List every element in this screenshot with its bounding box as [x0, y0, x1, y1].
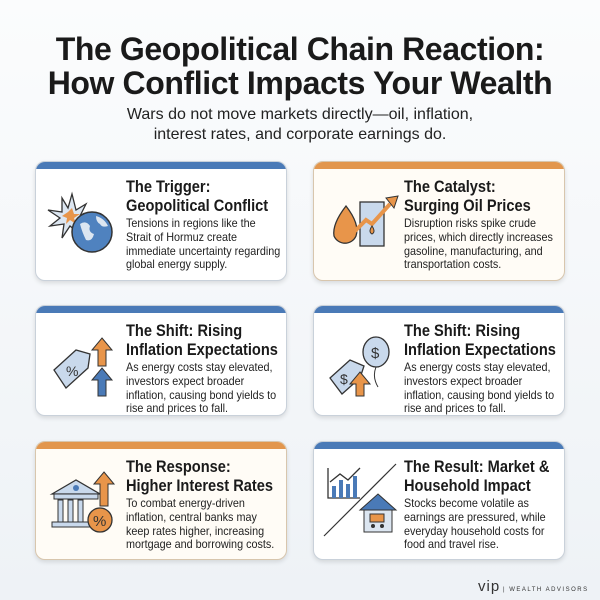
icon: bank with percent — [50, 471, 115, 533]
heading: Inflation Expectations — [126, 340, 278, 359]
title — [48, 31, 552, 101]
text — [404, 216, 553, 271]
panel: shift left — [35, 305, 287, 416]
heading: Surging Oil Prices — [404, 196, 531, 215]
text: keep rates higher, increasing — [126, 524, 264, 538]
text: inflation, central banks may — [126, 510, 257, 524]
text: global energy supply. — [126, 257, 227, 271]
heading — [404, 457, 549, 495]
icon: bank with percent: % — [93, 513, 106, 530]
heading — [404, 177, 531, 215]
text: As energy costs stay elevated, — [404, 360, 550, 374]
text: rise and prices to fall. — [404, 401, 506, 415]
panel: response — [35, 441, 287, 560]
heading: The Response: — [126, 457, 231, 476]
text: gasoline, manufacturing, and — [404, 244, 543, 258]
icon: explosion and globe — [48, 192, 113, 253]
text — [126, 496, 274, 551]
text: mortgage and borrowing costs. — [126, 537, 274, 551]
icon: oil drop, barrel, arrow — [333, 195, 399, 247]
heading: Inflation Expectations — [404, 340, 556, 359]
text: As energy costs stay elevated, — [126, 360, 272, 374]
icon: price tag with arrows — [53, 337, 113, 396]
heading: Household Impact — [404, 476, 531, 495]
text: Stocks become volatile as — [404, 496, 529, 510]
heading: The Shift: Rising — [404, 321, 520, 340]
icon: chart and house — [324, 464, 398, 536]
text: prices, which directly increases — [404, 230, 553, 244]
icon: tag and balloon: $ — [371, 345, 380, 362]
text: immediate uncertainty regarding — [126, 244, 280, 258]
text — [126, 216, 280, 271]
panel: trigger — [35, 161, 287, 281]
icon: price tag with arrows: % — [66, 363, 78, 379]
heading: The Trigger: — [126, 177, 210, 196]
heading — [126, 321, 278, 359]
logo: vip | WEALTH ADVISORS — [478, 578, 589, 595]
title: How Conflict Impacts Your Wealth — [48, 65, 552, 101]
subtitle: interest rates, and corporate earnings do. — [154, 126, 446, 143]
title: The Geopolitical Chain Reaction: — [56, 31, 544, 67]
icon: tag and balloon — [329, 336, 390, 396]
text: food and travel rise. — [404, 537, 499, 551]
subtitle — [127, 106, 473, 143]
heading: The Result: Market & — [404, 457, 549, 476]
icon: tag and balloon: $ — [340, 371, 348, 387]
text: Disruption risks spike crude — [404, 216, 536, 230]
text: Strait of Hormuz create — [126, 230, 237, 244]
text: Tensions in regions like the — [126, 216, 256, 230]
heading: The Shift: Rising — [126, 321, 242, 340]
text: rise and prices to fall. — [126, 401, 228, 415]
heading: The Catalyst: — [404, 177, 496, 196]
text: everyday household costs for — [404, 524, 544, 538]
text — [404, 496, 546, 551]
heading — [126, 457, 273, 495]
panel: result — [313, 441, 565, 560]
text: To combat energy-driven — [126, 496, 245, 510]
text: investors expect broader — [404, 374, 522, 388]
text: inflation, causing bond yields to — [126, 388, 276, 402]
text: transportation costs. — [404, 257, 501, 271]
text — [404, 360, 554, 415]
text — [126, 360, 276, 415]
text: inflation, causing bond yields to — [404, 388, 554, 402]
panel: catalyst — [313, 161, 565, 281]
panel: shift right — [313, 305, 565, 416]
heading: Geopolitical Conflict — [126, 196, 268, 215]
text: earnings are pressured, while — [404, 510, 546, 524]
heading — [126, 177, 268, 215]
heading — [404, 321, 556, 359]
subtitle: Wars do not move markets directly—oil, inflation, — [127, 106, 473, 123]
text: investors expect broader — [126, 374, 244, 388]
heading: Higher Interest Rates — [126, 476, 273, 495]
